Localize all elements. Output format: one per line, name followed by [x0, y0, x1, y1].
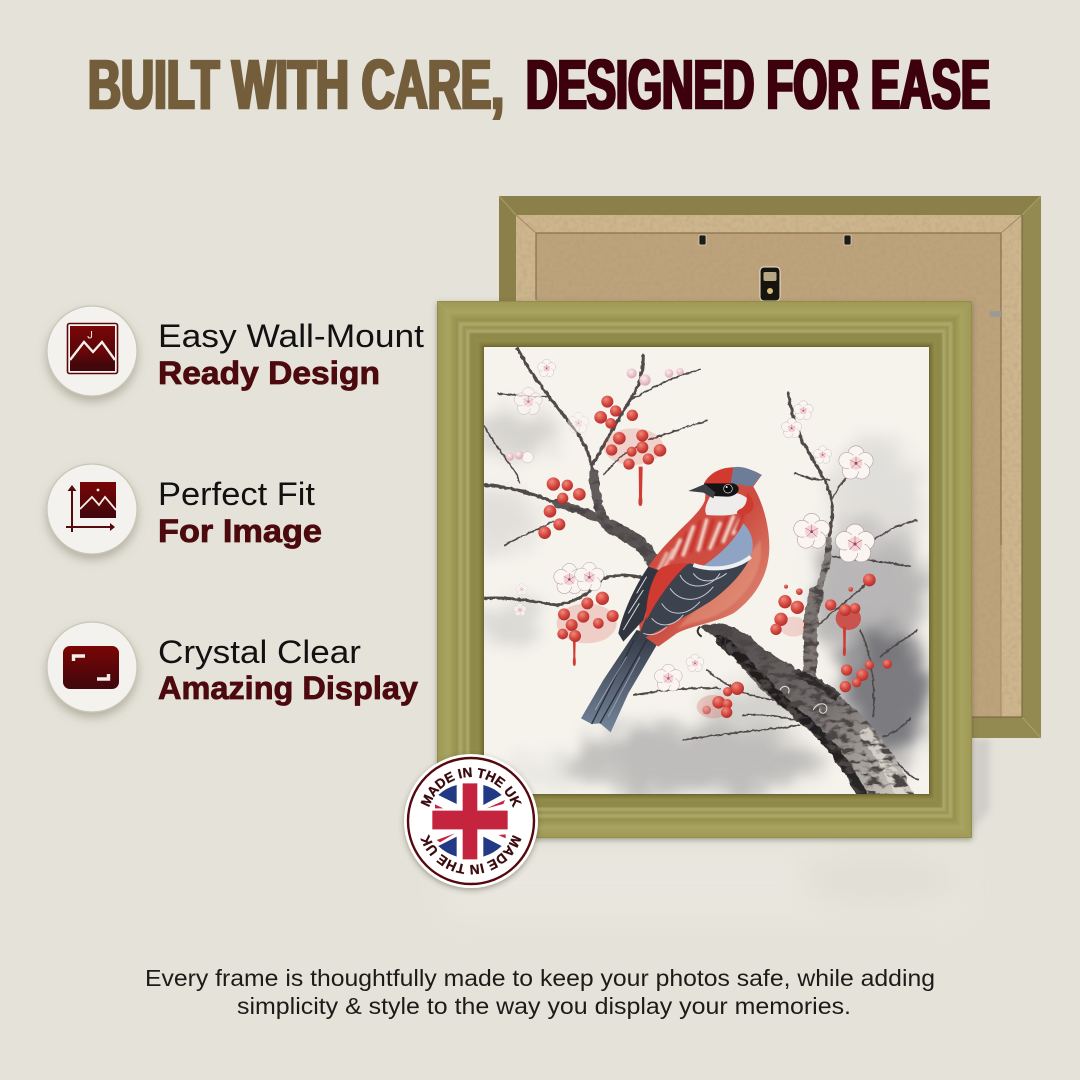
label: perfect fit: For Image [158, 513, 322, 549]
label: crystal clear [158, 634, 418, 706]
footer caption: Every frame is thoughtfully made to keep your photos safe, while adding [145, 965, 935, 991]
thick branches [557, 473, 829, 680]
eye [724, 484, 732, 493]
tail [581, 630, 662, 732]
sawtooth clasp [760, 267, 780, 301]
main trunk [700, 623, 915, 797]
pink buds and blossoms [506, 359, 875, 691]
label: easy wall-mount [158, 318, 424, 391]
bird [581, 467, 769, 732]
circular badge text: MADE IN THE UK [420, 767, 522, 808]
feature: easy wall-mount [47, 306, 424, 396]
front frame [437, 301, 972, 838]
red neck stripe [737, 492, 754, 515]
hanger clips [699, 235, 851, 245]
beak [688, 484, 715, 498]
white cheek [705, 492, 752, 516]
label: perfect fit [158, 476, 322, 549]
blue shoulder patch [700, 523, 753, 569]
grey wing [637, 557, 751, 642]
belly highlight [677, 540, 761, 630]
thin branches [483, 348, 918, 780]
head cap [704, 467, 762, 497]
side tab [990, 311, 1001, 317]
ink wash mist [463, 410, 930, 797]
trunk knots [780, 686, 827, 713]
red flank edge [646, 563, 688, 620]
label: crystal clear: Amazing Display [158, 670, 418, 706]
frame shadow on wall [972, 738, 990, 830]
breast feather streaks [657, 513, 743, 573]
reflection below frame [445, 850, 965, 920]
back view of frame [499, 196, 1041, 830]
feature: crystal clear [47, 622, 418, 712]
red ink splashes and drips [557, 428, 861, 718]
berries [538, 396, 892, 718]
icon badge: crystal clear [47, 622, 137, 712]
circular badge text: MADE IN THE UK [420, 834, 522, 875]
body [637, 468, 769, 647]
icon badge: wall mount [47, 306, 137, 396]
circular badge text [420, 767, 530, 880]
label: easy wall-mount: Ready Design [158, 355, 380, 391]
footer caption [145, 965, 935, 1019]
footer caption: simplicity & style to the way you display your memories. [237, 993, 851, 1019]
icon badge: perfect fit [47, 464, 137, 554]
label: crystal clear: Crystal Clear [158, 634, 361, 670]
back moulding [499, 196, 1041, 738]
outer wing feathers [618, 567, 658, 642]
feet [698, 627, 747, 667]
union flag [432, 783, 508, 859]
framed artwork: bird on blossom branch [463, 347, 930, 797]
backing edge lines [536, 233, 1001, 545]
label: perfect fit: Perfect Fit [158, 476, 315, 512]
title: BUILT WITH CARE, [88, 46, 504, 124]
cork backing [516, 215, 1022, 717]
made in the uk badge [400, 754, 540, 894]
label: easy wall-mount: Easy Wall-Mount [158, 318, 424, 354]
feature: perfect fit [47, 464, 322, 554]
